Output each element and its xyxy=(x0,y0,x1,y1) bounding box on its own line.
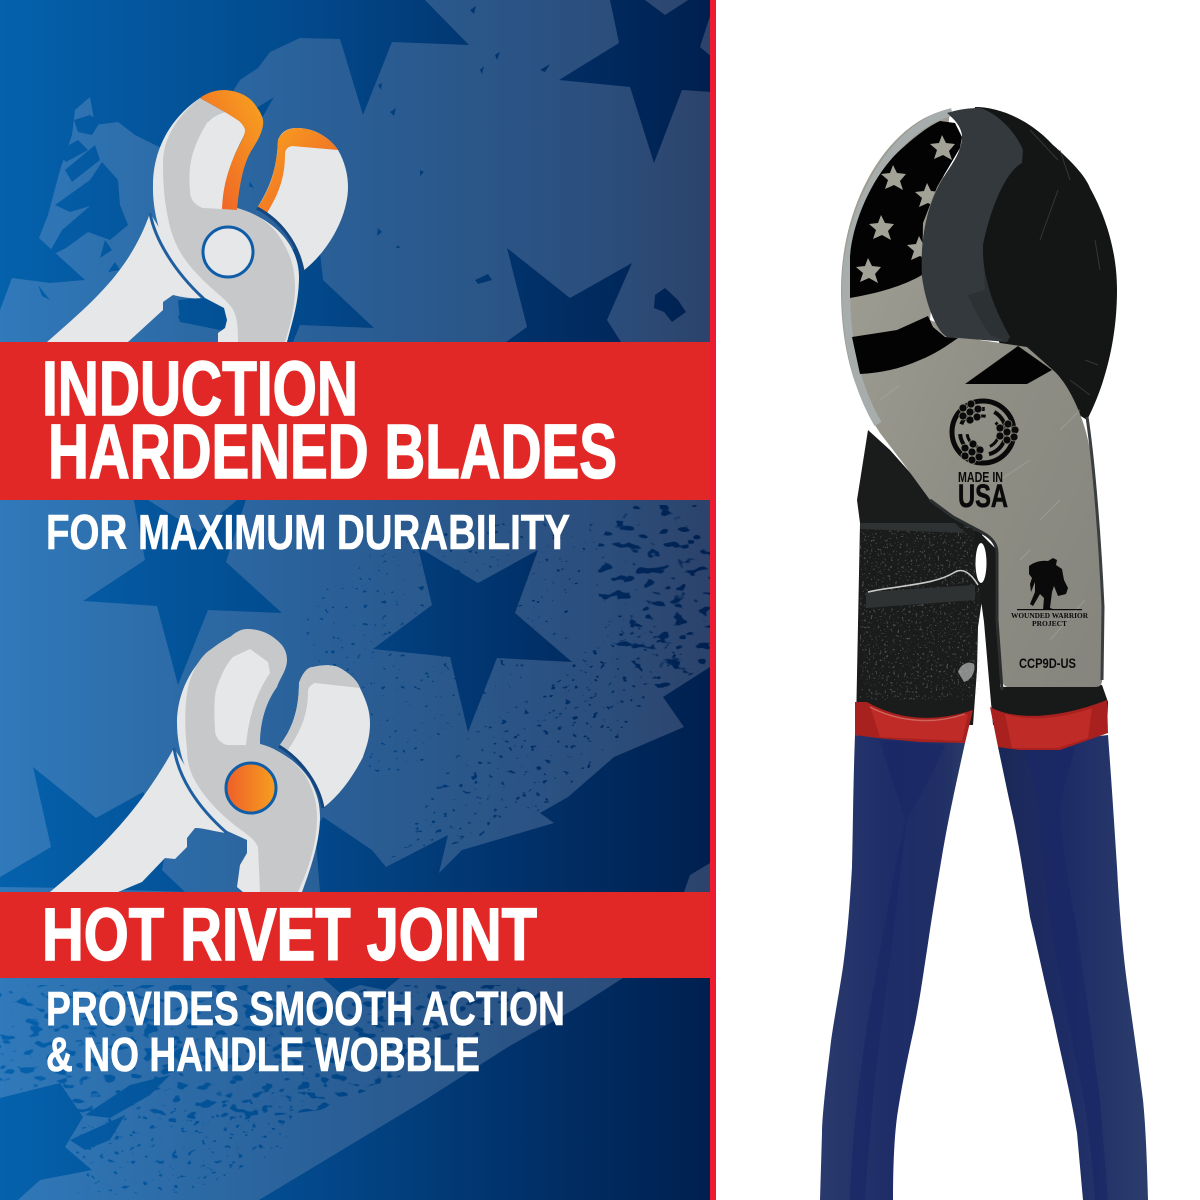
star: lower middle top panel xyxy=(506,248,632,342)
line: made in: MADE IN xyxy=(958,470,1003,486)
heading: hardened blades: HARDENED BLADES xyxy=(48,409,617,495)
line: wounded warrior: WOUNDED WARRIOR xyxy=(1011,611,1089,620)
line: no handle wobble: & NO HANDLE WOBBLE xyxy=(46,1029,480,1082)
lower black right jaw xyxy=(975,528,1108,730)
rule under silhouette xyxy=(1017,609,1082,610)
grip hole xyxy=(976,543,986,583)
text: made in usa xyxy=(958,470,1008,514)
icon: cutter with orange rivet xyxy=(50,629,370,892)
star: lower left xyxy=(0,767,185,892)
front blade: grey hardened edge xyxy=(922,108,1023,342)
grunge blobs: left of top icon xyxy=(38,115,180,322)
logo: cable cross-section rings xyxy=(952,400,1019,464)
panel: left blue flag background xyxy=(0,0,712,1200)
heading: induction: INDUCTION xyxy=(42,346,358,432)
handle: left red collar xyxy=(855,702,973,743)
silver body and head xyxy=(841,109,1103,687)
text: wounded warrior project xyxy=(1011,611,1089,628)
line: project: PROJECT xyxy=(1032,619,1067,628)
logo: wounded warrior silhouette xyxy=(1029,558,1068,610)
brush patch lower right xyxy=(684,863,710,892)
text: model number: CCP9D-US xyxy=(1019,655,1076,671)
handle: left blue grip xyxy=(820,735,965,1200)
band: induction hardened blades xyxy=(0,342,710,500)
star: mid left xyxy=(83,490,282,685)
flag: black canton with stars xyxy=(850,121,962,298)
line: provides smooth action: PROVIDES SMOOTH ACTION xyxy=(46,983,565,1036)
grunge speckle: bottom panel xyxy=(0,985,560,1125)
star: behind lower icon xyxy=(315,817,386,892)
text block: smooth action xyxy=(46,983,565,1082)
star: upper right xyxy=(559,0,712,163)
grunge speckle: top panel xyxy=(244,6,686,322)
pale rim xyxy=(846,112,952,424)
product photo: cable cutter xyxy=(820,107,1148,1200)
line: usa: USA xyxy=(958,478,1008,514)
icon: cutter with orange blades xyxy=(47,90,348,342)
star: behind top icon xyxy=(178,243,374,342)
handle: right blue grip xyxy=(998,735,1148,1200)
grunge speckle: mid panel xyxy=(590,505,710,690)
heading: hot rivet joint: HOT RIVET JOINT xyxy=(42,893,537,976)
divider: red vertical bar xyxy=(710,0,716,1200)
forged black lower jaw xyxy=(856,430,983,725)
flag: black stripe fragment xyxy=(965,346,1052,384)
brush stroke texture xyxy=(0,0,710,1200)
star: mid right xyxy=(373,547,572,732)
flag: black stripe xyxy=(852,316,958,374)
dark right edge xyxy=(1087,417,1103,680)
back jaw: black blade xyxy=(960,107,1117,420)
handle: right red collar xyxy=(990,700,1108,750)
band: hot rivet joint xyxy=(0,892,710,978)
subheading: for maximum durability: FOR MAXIMUM DURABILITY xyxy=(46,506,570,560)
